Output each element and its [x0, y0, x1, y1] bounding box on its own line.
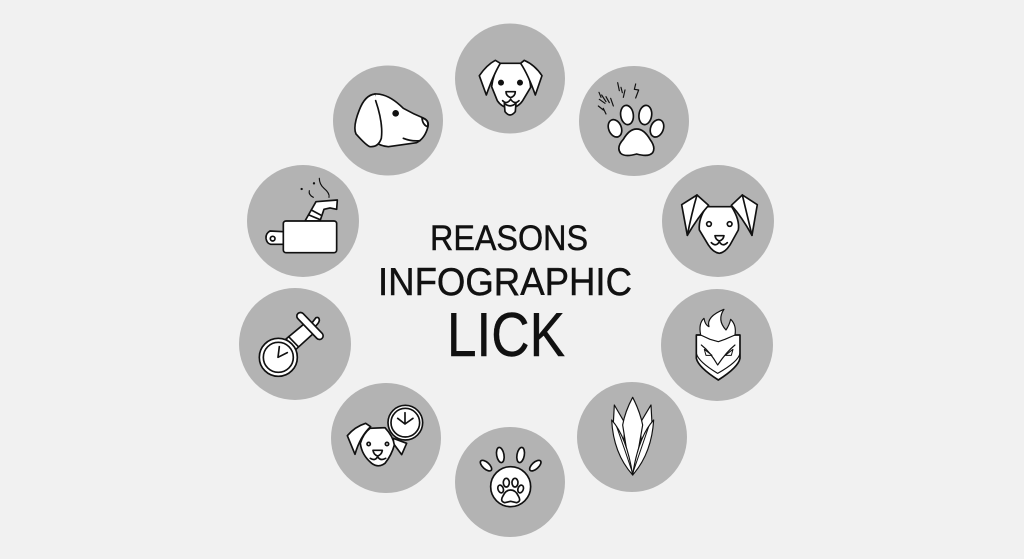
title [378, 219, 632, 370]
icon: dog face with clock [347, 405, 423, 466]
panel: bag with spout and steam [247, 165, 359, 277]
panel: dog with clock [331, 383, 441, 493]
panel: dog profile [333, 66, 443, 176]
icon: dog face with tongue [479, 60, 542, 115]
title: LICK [447, 301, 565, 370]
panel: flame guardian [661, 289, 773, 401]
panel: dog with big ears [662, 165, 774, 277]
title: REASONS [430, 219, 588, 258]
icon: paw with scratch marks [598, 83, 666, 156]
icon: leafy plant [612, 397, 654, 475]
icon: paw badge with rays [479, 447, 543, 507]
panel: paw with scratches [579, 66, 689, 176]
icon: box with spout and fumes [266, 178, 337, 253]
icon: dog head in profile [355, 94, 428, 147]
panel: clock tool [239, 288, 351, 400]
panel: dog face with tongue [455, 24, 565, 134]
icon: dog with angular ears [682, 195, 757, 253]
icon: clock with handle [259, 311, 325, 376]
panel: plant [577, 382, 687, 492]
panel: paw in circle with rays [455, 427, 565, 537]
title: INFOGRAPHIC [378, 261, 632, 304]
icon: flame mask [696, 309, 740, 380]
